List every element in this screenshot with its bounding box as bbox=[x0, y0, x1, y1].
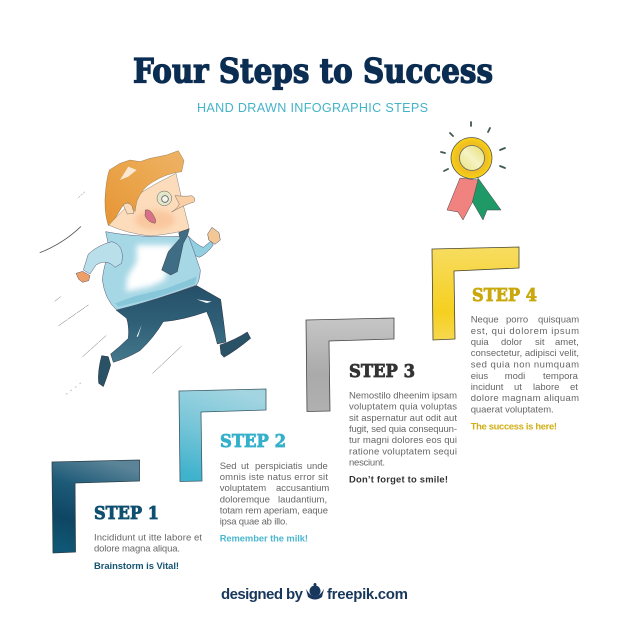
step 4 body: est, qui dolorem ipsum bbox=[471, 326, 579, 337]
panel: step 1 bbox=[52, 460, 202, 571]
shirt white wash bbox=[126, 245, 173, 292]
step 1 tagline: Brainstorm is Vital! bbox=[94, 560, 179, 571]
step 4 body: consectetur, adipisci velit, bbox=[471, 348, 579, 359]
step 2 body: voluptatem bbox=[220, 483, 266, 494]
speed lines bbox=[40, 191, 182, 394]
step 4 body: Neque bbox=[471, 314, 499, 326]
step 4 body: et bbox=[570, 382, 578, 393]
step 3 body: tur magni dolores eos qui bbox=[349, 435, 457, 446]
step 4 tagline: The success is here! bbox=[471, 420, 557, 431]
step 2 body: laudantium, bbox=[278, 494, 327, 505]
step 4 body: amet, bbox=[555, 337, 579, 348]
step 4 body: quia bbox=[471, 337, 489, 348]
step 3 body: nesciunt. bbox=[349, 458, 385, 468]
panel: step 3 bbox=[306, 318, 457, 484]
step 2 body: omnis iste natus error sit bbox=[220, 472, 328, 483]
step 4 body: sed quia non numquam bbox=[471, 360, 579, 370]
step 2 heading: STEP 2 bbox=[220, 432, 286, 452]
panel: step 4 bbox=[432, 247, 579, 431]
step 4 corner bbox=[432, 247, 519, 340]
step 4 body: porro bbox=[506, 314, 528, 326]
cheek and mouth bbox=[135, 210, 175, 230]
step 4 heading: STEP 4 bbox=[472, 286, 537, 306]
step 3 body: ratione voluptatem sequi bbox=[349, 446, 457, 457]
trousers bbox=[111, 286, 226, 362]
step 4 body bbox=[471, 314, 579, 415]
step 3 body bbox=[349, 390, 457, 468]
medal icon bbox=[441, 122, 505, 220]
step 3 body: sit aspernatur aut odit aut bbox=[349, 413, 457, 424]
title: Four Steps to Success bbox=[133, 52, 493, 90]
step 4 body: dolor bbox=[501, 337, 522, 348]
step 1 body: Incididunt ut itte labore et bbox=[94, 532, 202, 544]
step 2 body: doloremque bbox=[220, 494, 270, 505]
step 2 body: ut bbox=[241, 461, 249, 472]
step 4 body: tempora bbox=[543, 371, 579, 382]
gold disc bbox=[451, 138, 492, 178]
credit logo icon bbox=[306, 583, 324, 600]
far arm and hand bbox=[188, 227, 220, 257]
eye bbox=[157, 191, 172, 206]
step 1 heading: STEP 1 bbox=[94, 504, 159, 524]
footer credit bbox=[221, 583, 408, 603]
step 4 body: incidunt bbox=[471, 382, 504, 393]
step 4 body: quaerat voluptatem. bbox=[471, 404, 554, 415]
step 2 body: perspiciatis bbox=[255, 461, 303, 472]
medal centre bbox=[460, 146, 484, 170]
medal rays bbox=[441, 122, 505, 171]
back arm bbox=[76, 242, 122, 282]
step 3 body: Nemostilo dheenim ipsam bbox=[349, 390, 457, 401]
step 3 body: fugit, sed quia consequun- bbox=[349, 424, 457, 435]
rear shoe bbox=[98, 356, 111, 387]
illustration: running businessman bbox=[40, 151, 251, 394]
step 2 body: accusantium bbox=[276, 483, 329, 494]
credit text left: designed by bbox=[221, 586, 304, 603]
step 4 body: dolore magnam aliquam bbox=[471, 393, 579, 404]
step 3 body: voluptatem quia voluptas bbox=[349, 402, 457, 412]
step 2 body: ipsa quae ab illo. bbox=[220, 516, 288, 528]
step 3 corner bbox=[306, 318, 394, 412]
front shoe bbox=[220, 332, 251, 357]
nose bbox=[172, 196, 195, 212]
hair bbox=[105, 151, 184, 226]
subtitle: HAND DRAWN INFOGRAPHIC STEPS bbox=[197, 101, 428, 115]
hair highlight bbox=[120, 167, 137, 180]
step 1 body bbox=[94, 532, 202, 554]
red ribbon bbox=[447, 178, 478, 220]
shirt bbox=[102, 232, 200, 310]
step 4 body: sit bbox=[535, 337, 545, 348]
step 2 body bbox=[220, 461, 329, 528]
trouser highlights bbox=[137, 299, 212, 337]
step 2 body: totam rem aperiam, eaque bbox=[220, 505, 328, 516]
panel: step 2 bbox=[179, 389, 329, 544]
step 4 body: eius bbox=[471, 371, 488, 382]
step 4 body: labore bbox=[533, 382, 559, 393]
credit text right: freepik.com bbox=[327, 586, 408, 603]
step 1 body: dolore magna aliqua. bbox=[94, 544, 180, 554]
head bbox=[108, 173, 188, 236]
step 1 corner bbox=[52, 460, 140, 553]
green ribbon bbox=[472, 178, 501, 220]
step 2 tagline: Remember the milk! bbox=[220, 532, 308, 544]
step 3 heading: STEP 3 bbox=[349, 362, 415, 382]
step 2 body: Sed bbox=[220, 461, 237, 472]
step 3 tagline: Don’t forget to smile! bbox=[349, 473, 448, 484]
step 4 body: quisquam bbox=[538, 314, 579, 326]
step 4 body: ut bbox=[514, 382, 522, 393]
ear bbox=[123, 203, 134, 214]
shirt shadow bbox=[115, 277, 197, 307]
step 2 body: unde bbox=[307, 461, 328, 472]
tie bbox=[162, 229, 189, 275]
step 4 body: modi bbox=[505, 371, 525, 382]
step 2 corner bbox=[179, 389, 266, 482]
